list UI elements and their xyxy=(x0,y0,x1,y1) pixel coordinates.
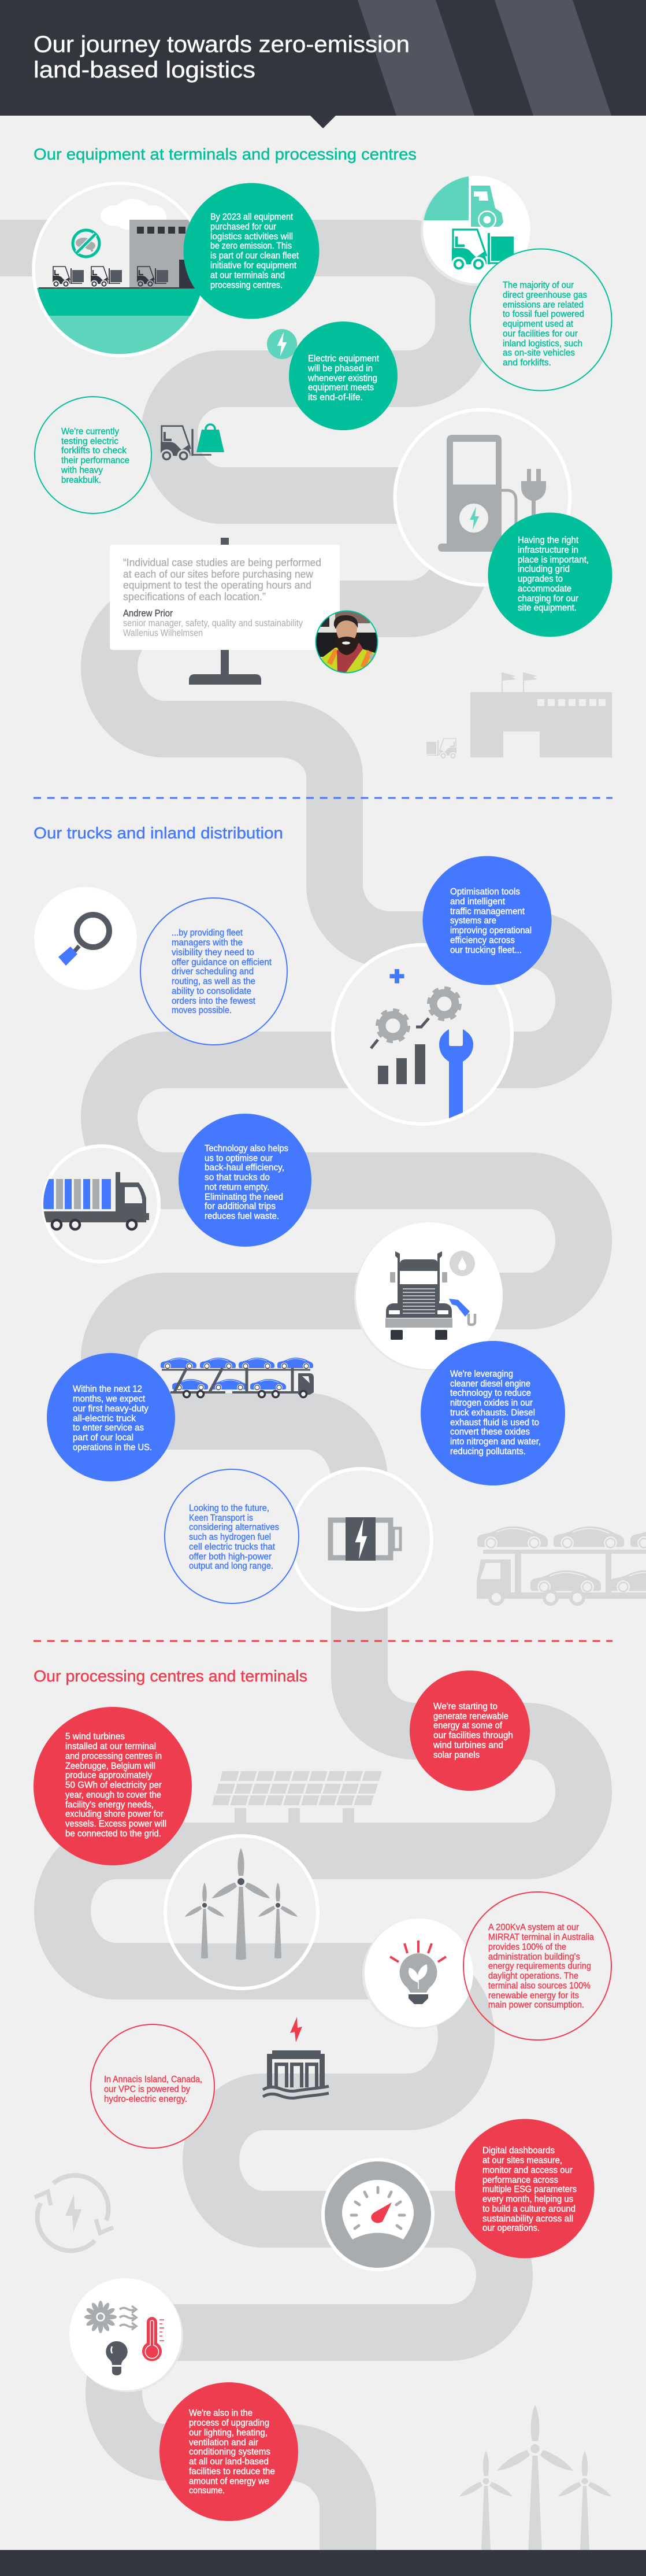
bulb glass xyxy=(400,1953,437,1993)
callout: majority of direct emissions: to fossil fuel powered xyxy=(503,309,584,319)
callout: fleet managers: offer guidance on efficient xyxy=(172,958,272,967)
illustration: lighting, heating, ventilation xyxy=(69,2278,183,2392)
icon: truck xyxy=(469,186,508,229)
callout: all-electric truck: part of our local xyxy=(73,1433,133,1443)
quote text: equipment to test the operating hours and xyxy=(123,579,311,591)
illustration: container truck xyxy=(40,1146,159,1262)
callout: digital dashboards: our operations. xyxy=(482,2223,540,2233)
illustration: warehouse with forklifts xyxy=(29,183,214,362)
callout: testing electric forklifts: forklifts to check xyxy=(61,446,127,456)
callout: digital dashboards: sustainability across all xyxy=(482,2214,573,2224)
ghost forklift xyxy=(426,738,456,759)
callout: majority of direct emissions: and forklifts. xyxy=(503,358,551,368)
callout: optimisation tools: systems are xyxy=(450,916,496,926)
wheels xyxy=(391,1330,447,1340)
truck container xyxy=(40,1179,111,1209)
callout: five wind turbines xyxy=(34,1707,192,1865)
callout: Annacis Island: our VPC is powered by xyxy=(104,2085,190,2094)
callout: digital dashboards: Digital dashboards xyxy=(482,2146,555,2156)
carrier cab xyxy=(298,1373,314,1395)
callout: upgrading systems: process of upgrading xyxy=(189,2418,269,2428)
sign base xyxy=(189,674,261,685)
callout: digital dashboards: performance across xyxy=(482,2175,558,2185)
callout: electric equipment: equipment meets xyxy=(308,383,374,393)
callout: upgrading systems: We're also in the xyxy=(189,2408,253,2418)
callout: back-haul efficiency: us to optimise our xyxy=(205,1154,273,1163)
callout: five wind turbines: installed at our terminal xyxy=(65,1742,156,1751)
callout: five wind turbines: facility's energy needs, xyxy=(65,1800,154,1810)
callout: fleet managers: orders into the fewest xyxy=(172,996,256,1006)
callout: back-haul efficiency: back-haul efficiency, xyxy=(205,1163,284,1173)
callout: upgrading systems: conditioning systems xyxy=(189,2447,270,2457)
callout: back-haul efficiency: not return empty. xyxy=(205,1182,269,1192)
icon: lightning badge xyxy=(267,329,297,359)
callout: cleaner diesel: convert these oxides xyxy=(450,1427,530,1437)
callout: all-electric truck: months, we expect xyxy=(73,1394,146,1404)
callout: majority of direct emissions: our facilities for our xyxy=(503,329,578,339)
sign post xyxy=(221,538,229,677)
callout: hydrogen fuel cell: Keen Transport is xyxy=(189,1513,253,1523)
title: Our journey towards zero-emission xyxy=(34,32,410,57)
callout: cleaner diesel xyxy=(421,1341,565,1485)
callout: 2023 zero emission: logistics activities will xyxy=(210,232,293,242)
callout: testing electric forklifts: their performance xyxy=(61,456,129,465)
callout: majority of direct emissions: emissions are related xyxy=(503,300,584,310)
callout: right infrastructure: including grid xyxy=(518,564,570,574)
callout: majority of direct emissions: as on-site vehicles xyxy=(503,348,575,358)
callout: optimisation tools xyxy=(423,856,551,985)
callout: testing electric forklifts: breakbulk. xyxy=(61,475,101,485)
title: land-based logistics xyxy=(34,57,255,83)
truck cab and chassis xyxy=(40,1172,149,1222)
callout: back-haul efficiency: Technology also helps xyxy=(205,1144,288,1154)
attribution: Wallenius Wilhelmsen xyxy=(123,628,203,638)
callout: cleaner diesel: cleaner diesel engine xyxy=(450,1379,530,1389)
quote signboard xyxy=(110,538,340,685)
callout: all-electric truck: our first heavy-duty xyxy=(73,1404,148,1414)
icon: wrench xyxy=(439,1029,473,1118)
callout: upgrading systems: amount of energy we xyxy=(189,2477,269,2486)
callout: Annacis Island: hydro-electric energy. xyxy=(104,2094,187,2104)
title xyxy=(34,32,410,83)
callout: five wind turbines: and processing centres in xyxy=(65,1751,162,1761)
plug xyxy=(521,469,546,516)
callout: hydrogen fuel cell: cell electric trucks that xyxy=(189,1542,276,1552)
callout: hydrogen fuel cell: such as hydrogen fuel xyxy=(189,1532,271,1542)
callout: testing electric forklifts: with heavy xyxy=(61,465,103,475)
attribution: Andrew Prior xyxy=(123,608,173,619)
charger body xyxy=(438,435,508,552)
shirt xyxy=(337,643,363,673)
callout: right infrastructure: site equipment. xyxy=(518,603,577,613)
exhaust pipes xyxy=(395,1251,442,1301)
callout: cleaner diesel: We're leveraging xyxy=(450,1369,513,1379)
vest xyxy=(321,648,375,672)
callout: cleaner diesel: into nitrogen and water, xyxy=(450,1437,541,1447)
callout: fleet managers: managers with the xyxy=(172,938,243,948)
icon: thermometer xyxy=(142,2317,162,2361)
section divider red xyxy=(34,1640,612,1642)
ghost recycle energy icon xyxy=(35,2175,113,2250)
callout: 200KvA system: energy requirements during xyxy=(488,1961,591,1971)
callout: upgrading systems: at all our land-based xyxy=(189,2457,269,2467)
callout: five wind turbines: produce approximately xyxy=(65,1771,152,1780)
callout: right infrastructure: charging for our xyxy=(518,594,578,604)
callout: optimisation tools: traffic management xyxy=(450,907,525,916)
right turbine xyxy=(257,1883,299,1958)
icon: hose xyxy=(469,1314,475,1325)
illustration: truck front and fuel xyxy=(354,1222,503,1370)
gauge needle xyxy=(371,2202,392,2223)
callout: cleaner diesel: exhaust fluid is used to xyxy=(450,1418,539,1428)
ticks xyxy=(371,1018,429,1048)
big turbine xyxy=(210,1848,272,1960)
callout: all-electric truck: operations in the US. xyxy=(73,1443,152,1453)
face xyxy=(336,620,357,638)
callout: right infrastructure xyxy=(488,512,612,637)
grille xyxy=(398,1284,439,1303)
callout: 2023 zero emission: purchased for our xyxy=(210,222,276,232)
callout: right infrastructure: infrastructure in xyxy=(518,545,578,555)
callout: five wind turbines: 5 wind turbines xyxy=(65,1732,125,1742)
hair xyxy=(334,615,358,629)
gauge dial xyxy=(342,2180,414,2239)
icon: forklift 3 xyxy=(137,267,168,287)
attribution: senior manager, safety, quality and sustainability xyxy=(123,618,303,629)
callout: 2023 zero emission: is part of our clean fleet xyxy=(210,251,299,261)
gauge ticks xyxy=(351,2187,404,2228)
heading: equipment: Our equipment at terminals and processing centres xyxy=(34,145,417,163)
icon: green forklift xyxy=(451,230,514,272)
ghost wind turbines xyxy=(458,2405,612,2552)
icon: magnifier xyxy=(34,887,137,990)
callout: 200KvA system: MIRRAT terminal in Australia xyxy=(488,1932,594,1942)
callout: back-haul efficiency: for additional trips xyxy=(205,1202,276,1211)
callout: renewable energy: We're starting to xyxy=(433,1702,498,1712)
illustration: optimisation tools xyxy=(333,945,512,1124)
callout: optimisation tools: efficiency across xyxy=(450,936,515,945)
callout: renewable energy xyxy=(410,1670,530,1791)
callout: 2023 zero emission: processing centres. xyxy=(210,280,283,290)
callout: all-electric truck: Within the next 12 xyxy=(73,1384,142,1394)
callout: upgrading systems: consume. xyxy=(189,2486,225,2496)
callout: renewable energy: energy at some of xyxy=(433,1721,503,1731)
callout: upgrading systems: ventilation and air xyxy=(189,2438,258,2448)
callout: electric equipment: its end-of-life. xyxy=(308,393,363,402)
callout: five wind turbines: excluding shore power for xyxy=(65,1809,164,1819)
illustration: truck and forklift quarters xyxy=(419,173,530,286)
sign board xyxy=(110,545,340,650)
callout: fleet managers: ...by providing fleet xyxy=(172,928,243,938)
callout: five wind turbines: be connected to the grid. xyxy=(65,1829,161,1839)
icon: fuel drop xyxy=(450,1251,475,1276)
illustration: car carrier truck xyxy=(161,1358,314,1397)
callout: majority of direct emissions: direct greenhouse gas xyxy=(503,290,587,300)
callout: optimisation tools: improving operational xyxy=(450,926,532,936)
illustration: dashboard gauge xyxy=(323,2160,433,2270)
icon: hydro dam xyxy=(263,2017,329,2098)
callout: cleaner diesel: reducing pollutants. xyxy=(450,1447,526,1457)
flags xyxy=(502,672,537,692)
callout: electric equipment xyxy=(289,321,398,430)
callout: optimisation tools: our trucking fleet... xyxy=(450,945,522,955)
callout: digital dashboards xyxy=(455,2119,594,2259)
callout: digital dashboards: at our sites measure, xyxy=(482,2156,562,2165)
callout: 200KvA system: terminal also sources 100% xyxy=(488,1981,591,1991)
cable xyxy=(502,490,516,546)
building xyxy=(129,220,190,287)
callout: digital dashboards: to build a culture around xyxy=(482,2204,576,2214)
icon: light bulb xyxy=(106,2341,128,2365)
illustration: battery xyxy=(291,1469,432,1610)
callout: renewable energy: solar panels xyxy=(433,1750,480,1760)
bulb leaves xyxy=(409,1965,427,1989)
callout: all-electric truck: all-electric truck xyxy=(73,1414,136,1424)
windows xyxy=(137,227,194,287)
callout: electric equipment: Electric equipment xyxy=(308,354,380,364)
callout: right infrastructure: accommodate xyxy=(518,584,571,594)
attribution xyxy=(123,608,303,638)
callout: right infrastructure: upgrades to xyxy=(518,574,563,584)
callout: 2023 zero emission: initiative for equipment xyxy=(210,261,297,271)
icon: forklift 2 xyxy=(91,267,122,287)
icon: no smoke sign xyxy=(73,230,99,257)
callout: upgrading systems xyxy=(159,2382,298,2521)
charger screen xyxy=(453,442,496,485)
quote text: specifications of each location.” xyxy=(123,590,266,603)
callout: 2023 zero emission: By 2023 all equipment xyxy=(210,212,294,222)
factory windows xyxy=(537,699,606,706)
factory building xyxy=(470,692,612,757)
icon: fuel nozzle xyxy=(449,1299,470,1317)
carrier cars xyxy=(161,1358,313,1391)
carrier frame xyxy=(162,1369,310,1370)
footer bar xyxy=(0,2550,646,2576)
callout: five wind turbines: Zeebrugge, Belgium will xyxy=(65,1761,155,1771)
ground line xyxy=(39,287,195,289)
hood xyxy=(386,1303,452,1318)
callout: renewable energy: generate renewable xyxy=(433,1712,508,1721)
callout: optimisation tools: and intelligent xyxy=(450,897,506,907)
callout: Annacis Island xyxy=(91,2024,214,2148)
callout: back-haul efficiency xyxy=(179,1114,311,1247)
callout: upgrading systems: our lighting, heating, xyxy=(189,2428,268,2438)
callout: five wind turbines: year, enough to cover the xyxy=(65,1790,161,1800)
bulb base xyxy=(409,1994,428,2004)
callout: renewable energy: wind turbines and xyxy=(433,1740,503,1750)
callout: five wind turbines: 50 GWh of electricity per xyxy=(65,1780,162,1790)
icon: gears xyxy=(378,989,459,1041)
illustration: charging station xyxy=(395,409,570,585)
callout: right infrastructure: place is important, xyxy=(518,555,589,565)
callout: fleet managers: moves possible. xyxy=(172,1006,232,1015)
callout: digital dashboards: multiple ESG parameters xyxy=(482,2185,577,2194)
callout: back-haul efficiency: so that trucks do xyxy=(205,1173,270,1182)
icon: wind arrows xyxy=(120,2306,136,2330)
callout: majority of direct emissions: equipment used at xyxy=(503,319,574,329)
callout: hydrogen fuel cell: considering alternatives xyxy=(189,1522,279,1532)
callout: electric equipment: will be phased in xyxy=(307,364,373,374)
callout: 2023 zero emission xyxy=(184,183,319,319)
callout: fleet managers: driver scheduling and xyxy=(172,967,254,977)
callout: testing electric forklifts: We're currently xyxy=(61,427,119,437)
callout: fleet managers xyxy=(140,898,287,1045)
section divider blue xyxy=(34,797,612,799)
cab xyxy=(400,1259,438,1271)
callout: all-electric truck xyxy=(47,1353,175,1481)
callout: digital dashboards: every month, helping us xyxy=(482,2194,573,2204)
quote text: at each of our sites before purchasing new xyxy=(123,568,314,580)
icon: cloud xyxy=(101,199,166,230)
callout: optimisation tools: Optimisation tools xyxy=(450,887,520,897)
callout: 200KvA system: renewable energy for its xyxy=(488,1991,579,2001)
callout: hydrogen fuel cell: output and long range. xyxy=(189,1561,273,1571)
illustration: eco bulb xyxy=(362,1919,473,2029)
ghost car carrier xyxy=(477,1527,646,1604)
mirrors xyxy=(390,1272,447,1283)
ghost solar panels xyxy=(212,1771,382,1823)
ground bands xyxy=(37,288,200,316)
bumper xyxy=(385,1318,452,1328)
callout: hydrogen fuel cell: Looking to the future, xyxy=(189,1503,269,1513)
callout: right infrastructure: Having the right xyxy=(518,535,579,545)
callout: hydrogen fuel cell xyxy=(165,1469,299,1603)
callout: 200KvA system xyxy=(463,1892,611,2040)
callout: 200KvA system: provides 100% of the xyxy=(488,1942,566,1952)
quote text xyxy=(123,556,321,603)
truck wheels xyxy=(52,1220,136,1229)
bar chart xyxy=(378,1044,425,1084)
callout: fleet managers: ability to consolidate xyxy=(172,986,251,996)
callout: majority of direct emissions: The majority of our xyxy=(503,280,574,290)
charger bolt badge xyxy=(459,504,488,533)
header banner xyxy=(0,0,646,128)
callout: electric equipment: whenever existing xyxy=(307,374,377,383)
callout: cleaner diesel: nitrogen oxides in our xyxy=(450,1398,533,1408)
heading: processing centres: Our processing centres and terminals xyxy=(34,1667,307,1685)
callout: fleet managers: visibility they need to xyxy=(172,948,254,958)
callout: hydrogen fuel cell: offer both high-power xyxy=(189,1552,272,1562)
callout: Annacis Island: In Annacis Island, Canada, xyxy=(104,2075,202,2085)
illustration: wind turbines xyxy=(162,1836,324,1993)
callout: fleet managers: routing, as well as the xyxy=(172,977,255,986)
callout: 2023 zero emission: be zero emission. This xyxy=(210,241,292,251)
carrier wheels xyxy=(184,1391,306,1397)
icon: forklift 1 xyxy=(53,267,84,287)
icon: fan xyxy=(84,2301,117,2333)
callout: renewable energy: our facilities through xyxy=(433,1731,513,1740)
callout: 2023 zero emission: at our terminals and xyxy=(210,271,285,280)
callout: majority of direct emissions xyxy=(470,249,611,391)
icon: plus xyxy=(389,969,404,983)
heading: trucks: Our trucks and inland distribution xyxy=(34,824,283,842)
callout: testing electric forklifts xyxy=(35,397,151,513)
callout: testing electric forklifts: testing electric xyxy=(61,437,118,446)
callout: 200KvA system: A 200KvA system at our xyxy=(488,1923,579,1932)
callout: majority of direct emissions: inland logistics, such xyxy=(503,339,582,349)
icon: forklift with weight xyxy=(160,424,224,462)
bulb rays xyxy=(390,1941,446,1962)
portrait: Andrew Prior xyxy=(315,610,378,677)
callout: cleaner diesel: truck exhausts. Diesel xyxy=(450,1408,535,1418)
callout: 200KvA system: daylight operations. The xyxy=(488,1971,578,1981)
callout: all-electric truck: to enter service as xyxy=(73,1423,144,1433)
callout: 200KvA system: administration building's xyxy=(488,1952,580,1962)
callout: upgrading systems: facilities to reduce the xyxy=(189,2467,275,2477)
callout: back-haul efficiency: Eliminating the need xyxy=(205,1192,283,1202)
callout: back-haul efficiency: reduces fuel waste. xyxy=(205,1211,279,1221)
beard xyxy=(335,633,359,655)
callout: 200KvA system: main power consumption. xyxy=(488,2000,584,2010)
callout: five wind turbines: vessels. Excess power will xyxy=(65,1819,166,1829)
left turbine xyxy=(184,1883,225,1958)
quote text: “Individual case studies are being performed xyxy=(123,556,321,568)
callout: cleaner diesel: technology to reduce xyxy=(450,1388,531,1398)
callout: digital dashboards: monitor and access our xyxy=(482,2165,573,2175)
ghost factory xyxy=(470,672,612,757)
